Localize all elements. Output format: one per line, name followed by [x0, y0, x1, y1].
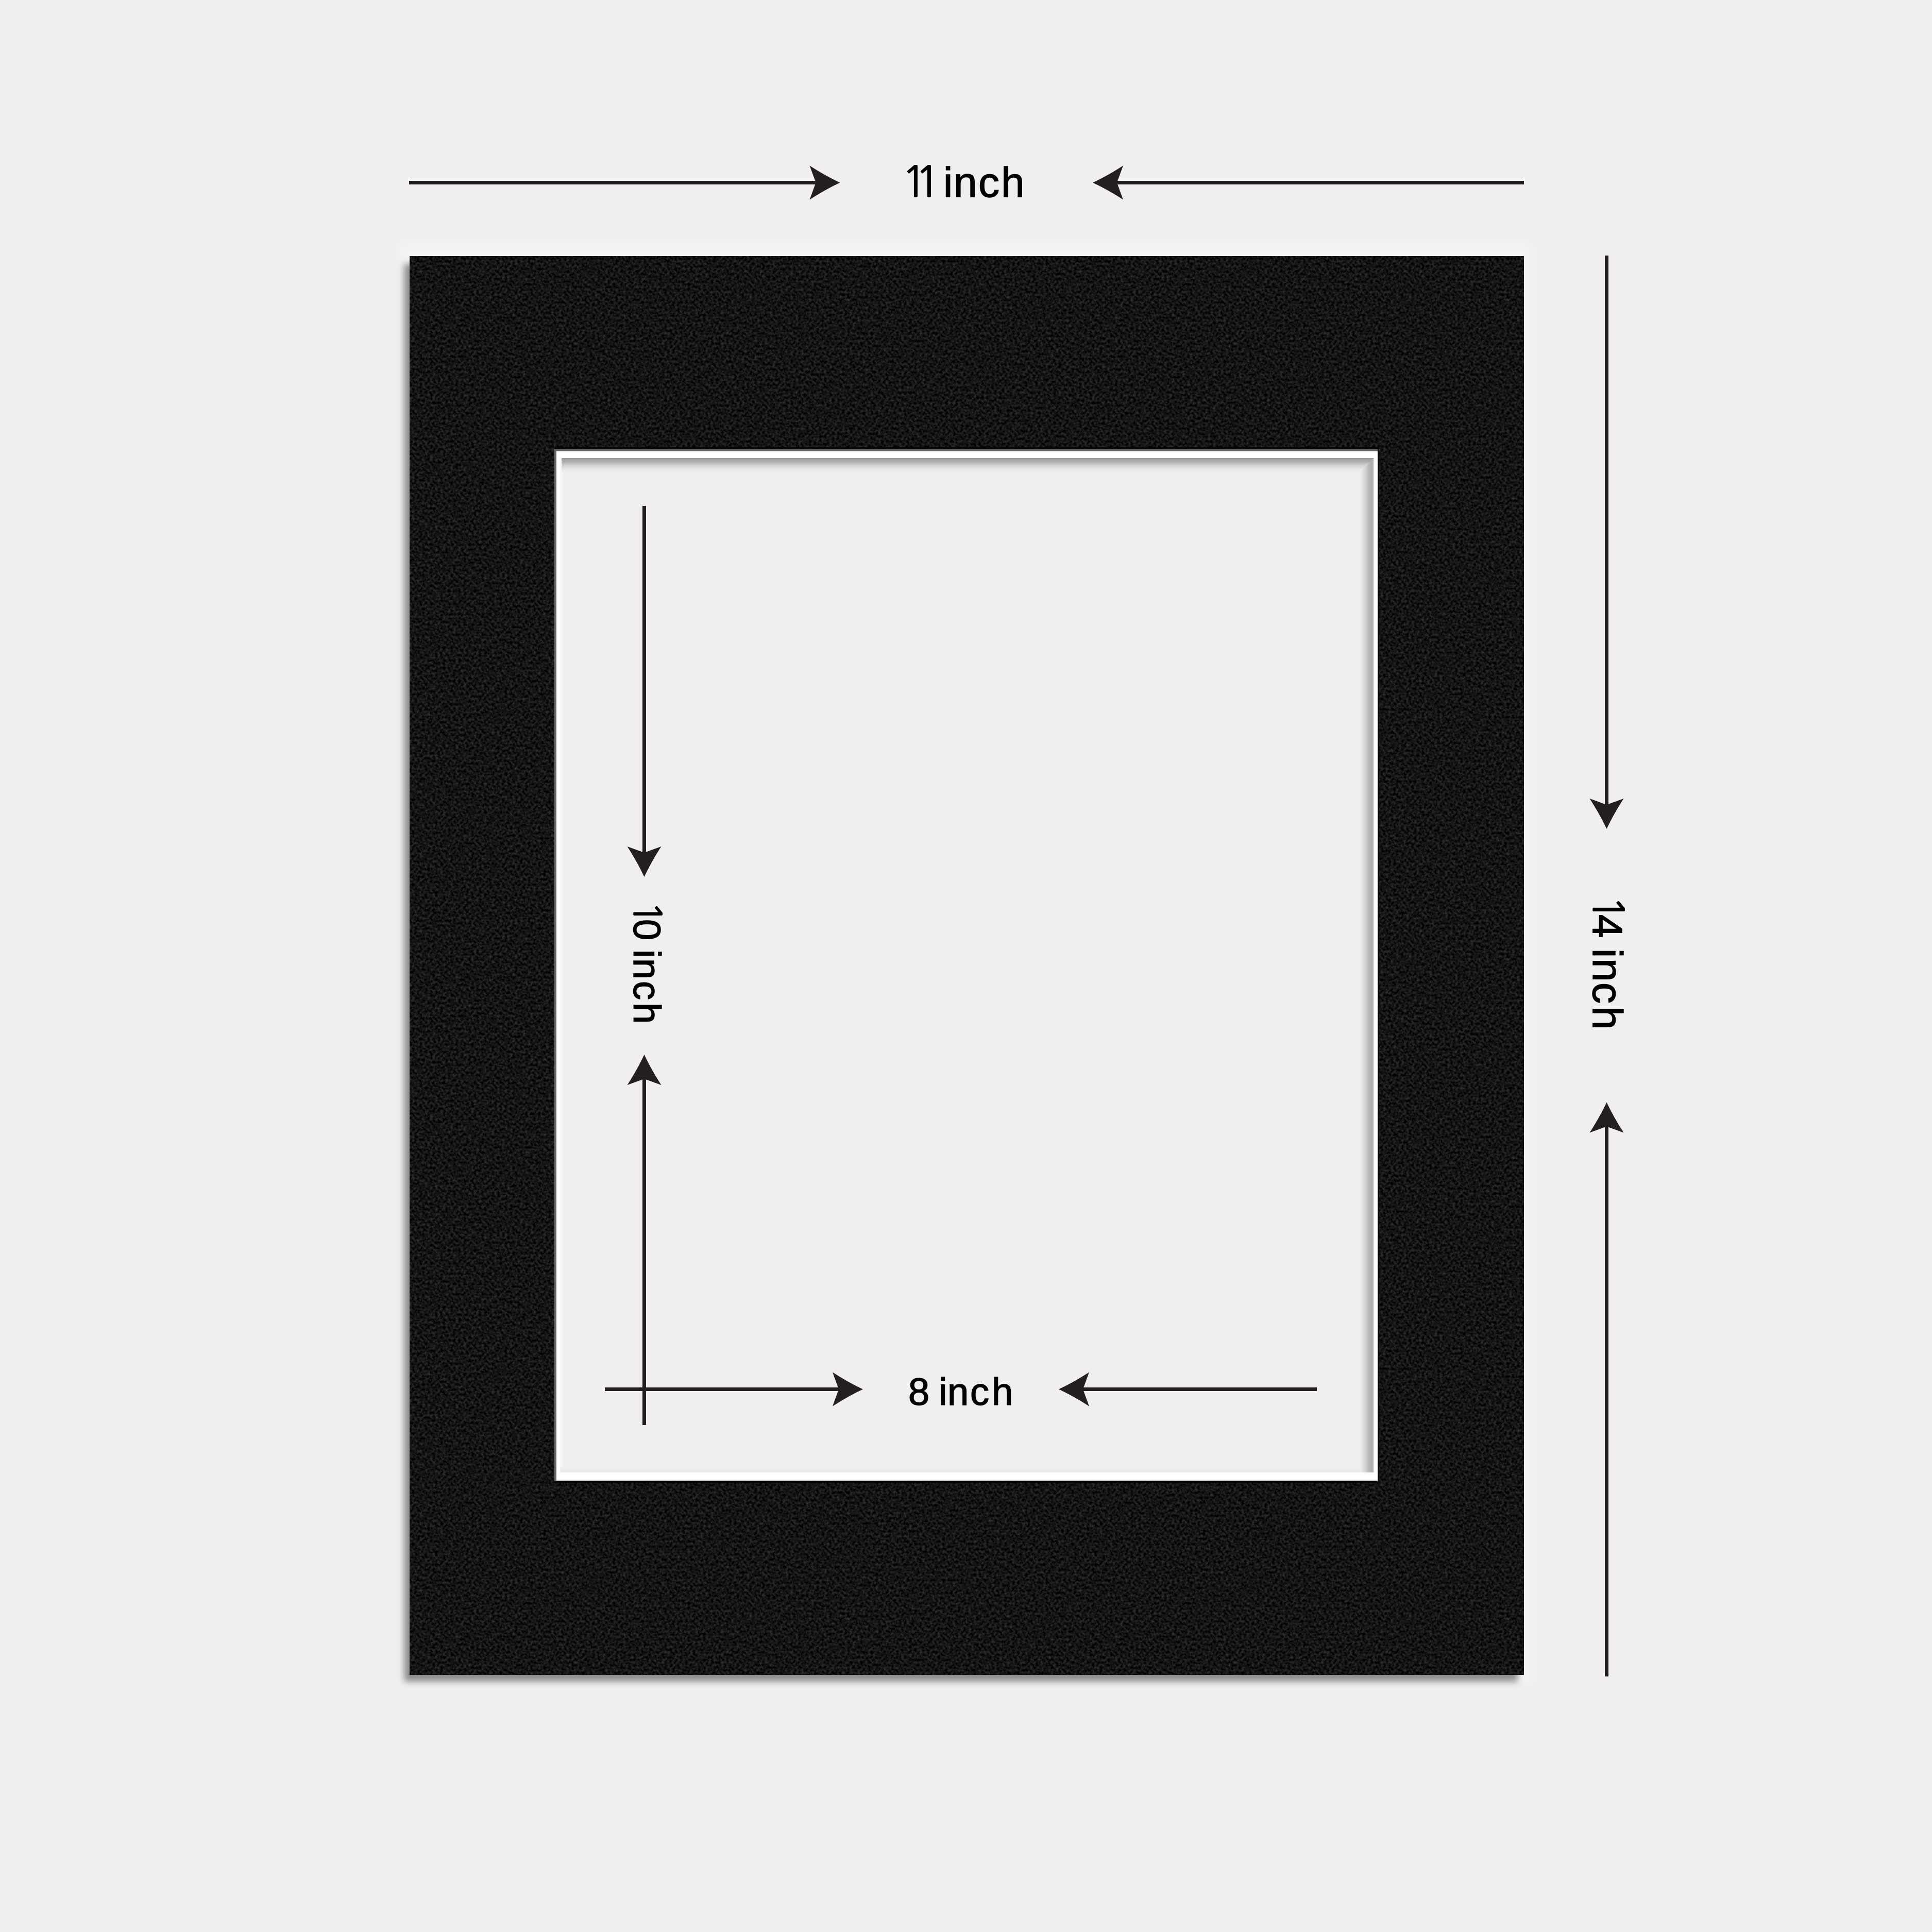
label: 10 inch: 1 — [628, 901, 666, 924]
label: 11 inch: 1 — [915, 161, 941, 203]
label: 8 inch: 8 inch — [908, 1370, 1013, 1413]
label: 14 inch: 1 — [1587, 895, 1629, 921]
arrow: 10 inch bottom — [628, 1055, 662, 1425]
arrow: 11 inch right — [1093, 166, 1524, 200]
label: 11 inch: inch — [943, 159, 1025, 206]
label: 14 inch: 4 inch — [1584, 914, 1631, 1030]
mat drop shadow — [404, 264, 1518, 1682]
arrow: 14 inch top — [1590, 256, 1624, 829]
mat halo — [401, 244, 1531, 1683]
mat window — [554, 447, 1379, 1483]
arrow: 10 inch top — [628, 506, 662, 877]
label: 11 inch: 1 — [902, 161, 927, 203]
arrow: 11 inch left — [409, 166, 840, 200]
arrow: 8 inch right — [1059, 1372, 1317, 1406]
panel: black picture mat — [401, 244, 1531, 1683]
arrow: 14 inch bottom — [1590, 1103, 1624, 1676]
arrow: 8 inch left — [605, 1372, 863, 1406]
label: 10 inch: 0 inch — [625, 919, 668, 1024]
mat board — [410, 256, 1524, 1675]
